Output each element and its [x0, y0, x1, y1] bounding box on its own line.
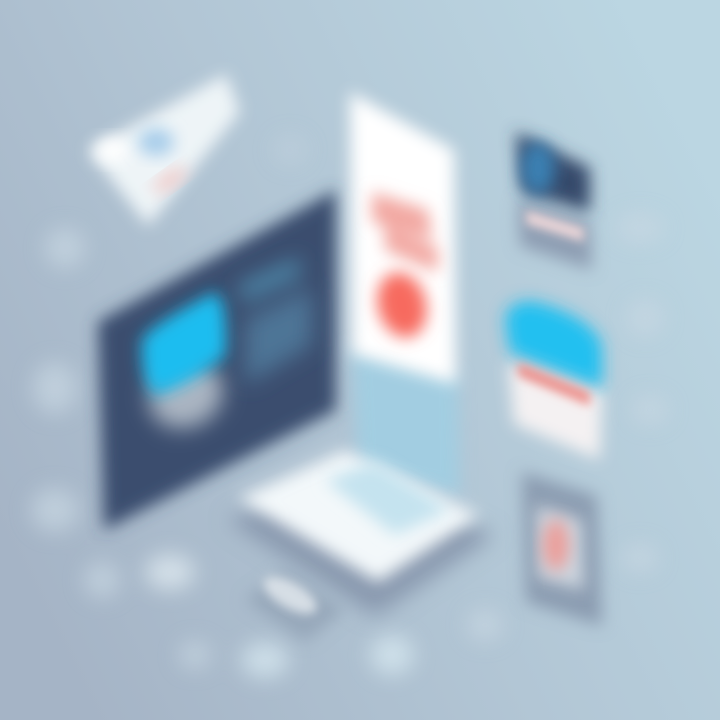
monitor — [98, 190, 336, 530]
phone screen — [536, 505, 584, 590]
keyboard — [325, 462, 450, 535]
phone pink band — [526, 210, 584, 242]
envelope blue mark — [138, 128, 174, 156]
device top — [258, 569, 322, 621]
lower screen — [352, 345, 460, 496]
card blue top — [505, 301, 602, 388]
right phone bottom — [522, 472, 602, 626]
envelope card — [88, 74, 240, 226]
envelope bright corner — [96, 138, 128, 162]
monitor screen — [98, 190, 336, 530]
card red line — [518, 362, 590, 406]
monitor grey panel — [138, 350, 234, 440]
card body — [508, 362, 602, 460]
monitor blue panel — [142, 292, 226, 395]
phone frame — [518, 200, 592, 270]
laptop deck — [238, 450, 480, 582]
tall phone — [350, 92, 460, 496]
laptop shadow — [228, 470, 494, 616]
red bars — [372, 192, 438, 272]
laptop base — [228, 450, 494, 616]
monitor chart lines — [240, 258, 312, 385]
envelope red line — [150, 163, 190, 197]
envelope body — [88, 74, 240, 226]
right phone top — [516, 132, 592, 270]
small device — [245, 569, 345, 642]
phone red — [543, 519, 569, 571]
right card middle — [505, 301, 602, 460]
red heart — [370, 267, 434, 343]
floating dots — [31, 134, 668, 678]
white panel — [350, 92, 456, 384]
phone screen — [516, 132, 590, 212]
phone frame — [522, 472, 602, 626]
device shadow — [245, 570, 345, 642]
phone blue — [521, 142, 555, 194]
